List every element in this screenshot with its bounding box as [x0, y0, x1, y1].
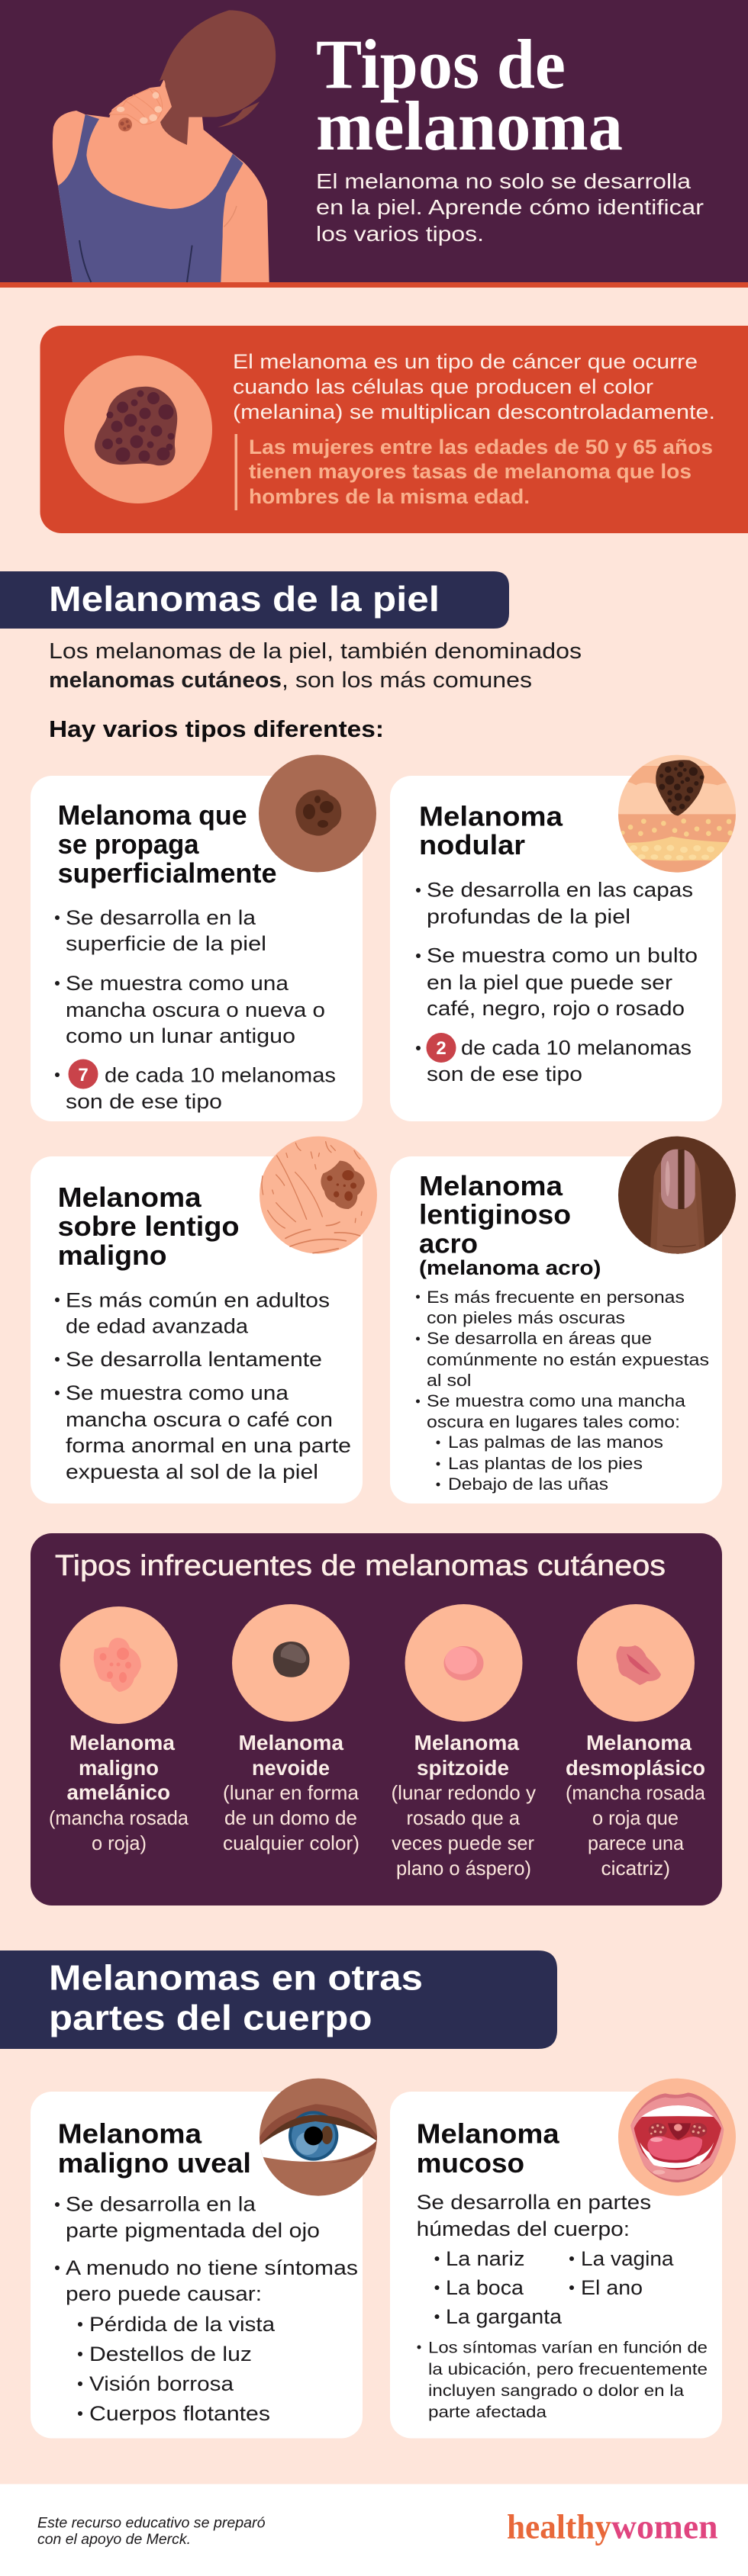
bullet list: de cada 10 melanomas: [105, 1063, 336, 1086]
definition text: [233, 350, 715, 423]
column: spitzoid: [391, 1604, 536, 1880]
bullet list: de cada 10 melanomas: [461, 1036, 692, 1059]
card title: [58, 1182, 240, 1271]
bullet list: [55, 906, 336, 1113]
icon: melanoma mole: [64, 355, 212, 503]
column: desmoplastic: (mancha rosada: [566, 1781, 706, 1804]
column: amelanotic: Melanoma: [69, 1731, 175, 1754]
column: desmoplastic: Melanoma: [586, 1731, 692, 1754]
bullet list: Destellos de luz: [89, 2343, 252, 2365]
body text and list: la ubicación, pero frecuentemente: [428, 2361, 708, 2378]
definition text: cuando las células que producen el color: [233, 375, 653, 398]
bullet list: [416, 1288, 709, 1494]
body text and list: El ano: [581, 2276, 643, 2299]
bullet list: A menudo no tiene síntomas: [66, 2256, 358, 2279]
body text and list: parte afectada: [428, 2404, 546, 2421]
definition text: El melanoma es un tipo de cáncer que ocurre: [233, 350, 698, 373]
column: desmoplastic: cicatriz): [601, 1857, 670, 1880]
badge: 7 of 10: [69, 1059, 98, 1089]
bullet list: Pérdida de la vista: [89, 2313, 276, 2336]
card title: nodular: [419, 829, 525, 860]
bullet list: forma anormal en una parte: [66, 1434, 351, 1457]
column: amelanotic: [49, 1606, 189, 1854]
column: amelanotic: maligno: [79, 1756, 159, 1780]
panel: superficial spreading melanoma: [31, 755, 376, 1121]
bullet list: [416, 879, 698, 1085]
column: desmoplastic: desmoplásico: [566, 1756, 705, 1780]
column: desmoplastic: o roja que: [592, 1806, 679, 1829]
heading: skin melanomas: [0, 571, 509, 629]
bullet list: pero puede causar:: [66, 2282, 262, 2305]
bullet list: al sol: [427, 1371, 472, 1390]
bullet list: de edad avanzada: [66, 1315, 249, 1338]
intro text: Los melanomas de la piel, también denominados: [49, 639, 582, 664]
badge: 2 of 10: [426, 1033, 456, 1063]
column: spitzoid: veces puede ser: [392, 1832, 534, 1854]
card title: maligno uveal: [58, 2147, 251, 2179]
bullet list: expuesta al sol de la piel: [66, 1460, 318, 1483]
card title: [58, 799, 277, 889]
column: spitzoid: rosado que a: [406, 1806, 521, 1829]
bullet list: Se muestra como una: [66, 1381, 289, 1404]
icon: finger nail with dark stripe: [618, 1137, 736, 1255]
bullet list: Las plantas de los pies: [448, 1454, 643, 1473]
column: amelanotic: o roja): [92, 1832, 147, 1854]
panel: lentigo maligna melanoma: [31, 1137, 377, 1503]
bullet list: Cuerpos flotantes: [89, 2402, 270, 2425]
bullet list: oscura en lugares tales como:: [427, 1413, 680, 1431]
subheading: Hay varios tipos diferentes:: [49, 716, 384, 742]
bullet list: Visión borrosa: [89, 2372, 234, 2395]
column: amelanotic: amelánico: [67, 1780, 170, 1804]
panel: uveal melanoma: [31, 2079, 379, 2438]
card title: [419, 801, 563, 860]
panel: what is melanoma: [40, 326, 748, 533]
bullet list: Las palmas de las manos: [448, 1433, 663, 1452]
card title: Melanoma: [419, 1170, 563, 1201]
definition text: (melanina) se multiplican descontroladamente.: [233, 400, 715, 423]
card title: Melanoma: [58, 1182, 202, 1213]
column: nevoid: nevoide: [252, 1756, 330, 1780]
bullet list: [55, 2192, 358, 2425]
column: nevoid: (lunar en forma: [223, 1781, 359, 1804]
sponsor note: [37, 2516, 266, 2548]
icon: small mole on the back: [118, 117, 132, 131]
bullet list: son de ese tipo: [427, 1063, 582, 1085]
icon: nodular melanoma skin layers: [618, 755, 736, 873]
heading: melanomas in other parts of the body: [0, 1950, 557, 2049]
icon: wrinkled skin with mole: [260, 1137, 377, 1254]
bullet list: Se muestra como un bulto: [427, 944, 698, 967]
card title: Melanoma: [419, 801, 563, 831]
icon: superficial mole: [259, 755, 376, 873]
column: amelanotic: (mancha rosada: [49, 1806, 189, 1829]
sponsor note: Este recurso educativo se preparó: [37, 2516, 266, 2531]
bullet list: café, negro, rojo o rosado: [427, 997, 685, 1020]
column: nevoid: [223, 1604, 359, 1854]
body text and list: Los síntomas varían en función de: [428, 2339, 708, 2357]
bullet list: superficie de la piel: [66, 932, 266, 955]
body text and list: La vagina: [581, 2247, 675, 2270]
card title: (melanoma acro): [419, 1256, 601, 1279]
panel: mucosal melanoma: [390, 2079, 736, 2438]
bullet list: Debajo de las uñas: [448, 1475, 608, 1494]
title: Tipos de: [316, 25, 566, 103]
bullet list: mancha oscura o nueva o: [66, 999, 325, 1021]
column: spitzoid: plano o áspero): [396, 1857, 531, 1880]
bullet list: Se desarrolla en las capas: [427, 879, 693, 902]
card title: se propaga: [58, 828, 200, 860]
column: spitzoid: spitzoide: [417, 1756, 509, 1780]
bullet list: Se desarrolla en la: [66, 2192, 256, 2215]
subtitle: en la piel. Aprende cómo identificar: [316, 195, 704, 219]
footer: [0, 2484, 748, 2576]
bullet list: Se desarrolla en áreas que: [427, 1329, 652, 1348]
column: spitzoid: Melanoma: [414, 1731, 519, 1754]
icon: open mouth: [618, 2079, 736, 2196]
card title: lentiginoso: [419, 1199, 571, 1230]
callout: women statistic: tienen mayores tasas de melanoma que los: [249, 460, 692, 483]
card title: Melanoma: [58, 2118, 202, 2150]
callout: women statistic: Las mujeres entre las edades de 50 y 65 años: [249, 436, 713, 458]
bullet list: Se muestra como una: [66, 972, 289, 995]
badge: 7 of 10: 7: [78, 1065, 89, 1085]
panel: nodular melanoma: [390, 748, 743, 1121]
column: nevoid: de un domo de: [224, 1806, 357, 1829]
title: [316, 25, 623, 165]
callout: women statistic: [235, 434, 713, 510]
title: melanoma: [316, 87, 623, 165]
card title: [419, 1170, 601, 1279]
card title: [58, 2118, 251, 2179]
bullet list: comúnmente no están expuestas: [427, 1350, 709, 1369]
bullet list: Es más frecuente en personas: [427, 1288, 685, 1307]
intro text: melanomas cutáneos: [49, 668, 282, 693]
panel: acral lentiginous melanoma: [390, 1137, 736, 1503]
column: spitzoid: (lunar redondo y: [391, 1781, 536, 1804]
bullet list: profundas de la piel: [427, 905, 630, 928]
heading: melanomas in other parts of the body: partes del cuerpo: [49, 1998, 372, 2037]
bullet list: mancha oscura o café con: [66, 1408, 333, 1431]
column: nevoid: cualquier color): [223, 1832, 359, 1854]
column: desmoplastic: [566, 1604, 706, 1880]
subtitle: los varios tipos.: [316, 222, 484, 246]
heading: skin melanomas: Melanomas de la piel: [49, 579, 440, 619]
card title: superficialmente: [58, 857, 277, 889]
heading: melanomas in other parts of the body: Melanomas en otras: [49, 1957, 423, 1997]
bullet list: Es más común en adultos: [66, 1289, 330, 1312]
sponsor note: con el apoyo de Merck.: [37, 2532, 191, 2548]
logo: healthywomen: [507, 2508, 717, 2546]
illustration: woman touching her neck: [53, 10, 276, 282]
logo: healthywomen: women: [611, 2508, 717, 2546]
logo: healthywomen: healthy: [507, 2508, 611, 2546]
badge: 2 of 10: 2: [436, 1038, 447, 1059]
icon: eye with melanoma: [257, 2079, 379, 2196]
card title: mucoso: [417, 2147, 524, 2179]
body text and list: La garganta: [446, 2305, 563, 2328]
bullet list: Se desarrolla en la: [66, 906, 256, 929]
card title: acro: [419, 1228, 478, 1259]
card title: sobre lentigo: [58, 1211, 240, 1242]
bullet list: son de ese tipo: [66, 1090, 222, 1113]
body text and list: La boca: [446, 2276, 524, 2299]
bullet list: Se muestra como una mancha: [427, 1391, 686, 1410]
heading: Tipos infrecuentes de melanomas cutáneos: [55, 1550, 666, 1582]
subtitle: El melanoma no solo se desarrolla: [316, 169, 691, 193]
card title: [417, 2118, 560, 2179]
card title: Melanoma: [417, 2118, 560, 2150]
bullet list: con pieles más oscuras: [427, 1308, 625, 1327]
bullet list: [55, 1289, 351, 1483]
header panel: [0, 0, 748, 288]
bullet list: en la piel que puede ser: [427, 971, 672, 994]
body text and list: húmedas del cuerpo:: [417, 2217, 630, 2240]
card title: maligno: [58, 1240, 167, 1271]
body text and list: La nariz: [446, 2247, 525, 2270]
callout: women statistic: hombres de la misma edad.: [249, 485, 530, 508]
intro text: , son los más comunes: [282, 668, 532, 693]
body text and list: [417, 2191, 708, 2421]
bullet list: parte pigmentada del ojo: [66, 2219, 320, 2242]
subtitle: [316, 169, 704, 246]
panel: rare cutaneous melanomas: [31, 1533, 722, 1905]
body text and list: incluyen sangrado o dolor en la: [428, 2382, 684, 2400]
body text and list: Se desarrolla en partes: [417, 2191, 651, 2214]
column: desmoplastic: parece una: [588, 1832, 685, 1854]
bullet list: Se desarrolla lentamente: [66, 1348, 322, 1371]
card title: Melanoma que: [58, 799, 247, 831]
bullet list: como un lunar antiguo: [66, 1024, 295, 1047]
column: nevoid: Melanoma: [238, 1731, 343, 1754]
intro text: [49, 639, 582, 693]
